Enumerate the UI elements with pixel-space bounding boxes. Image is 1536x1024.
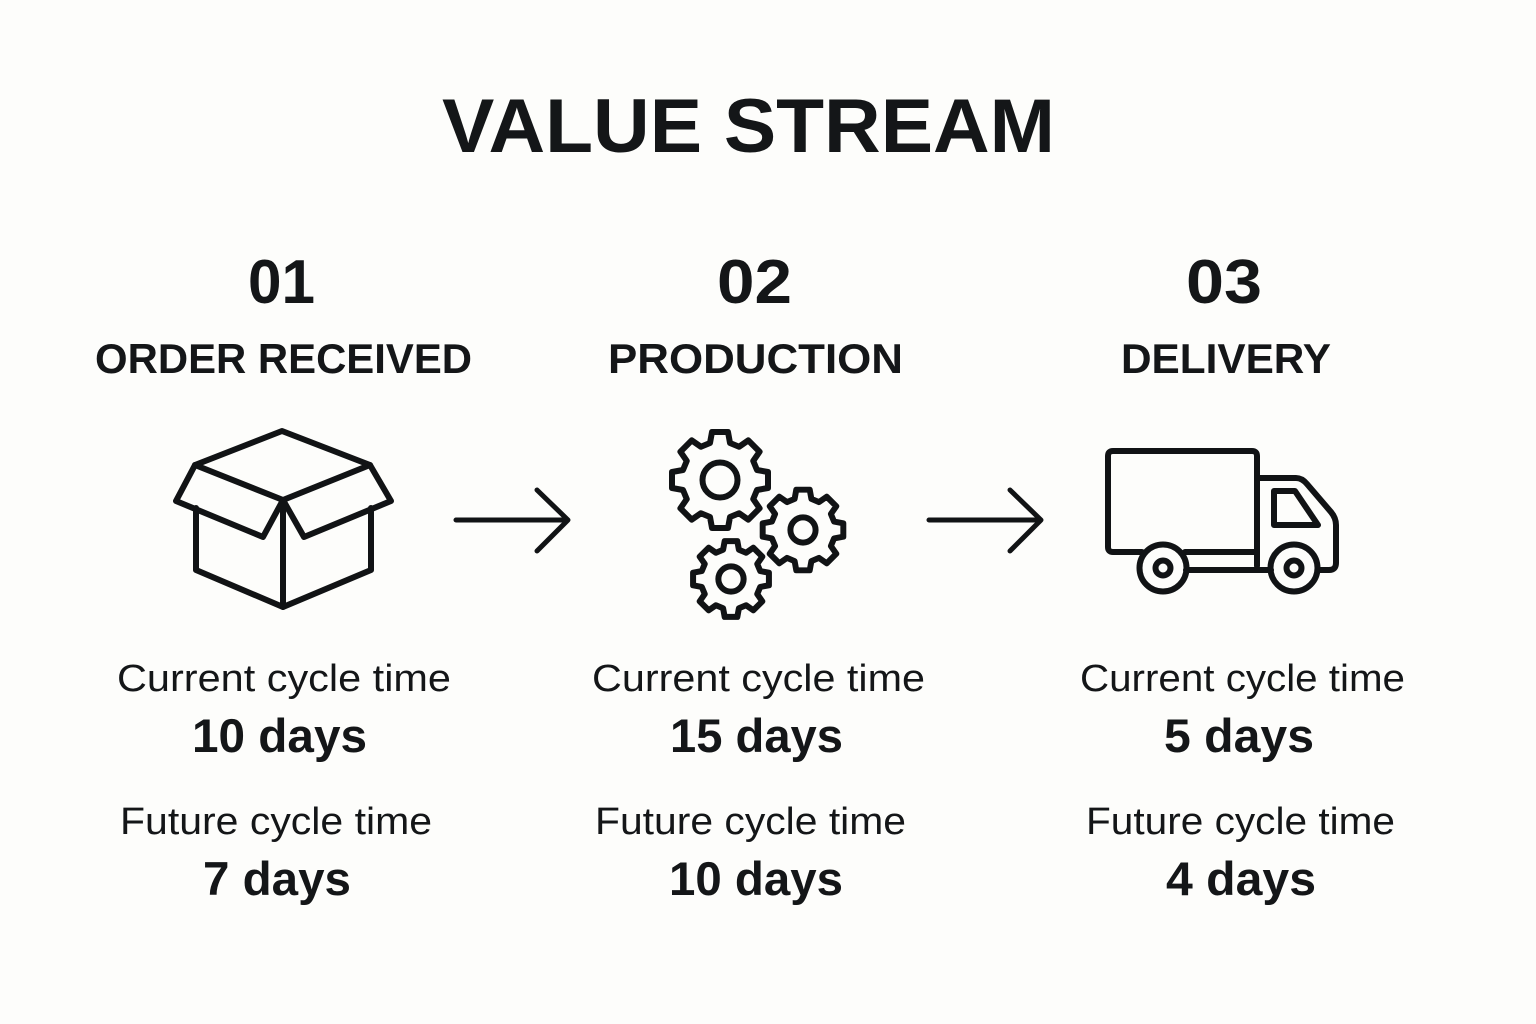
label: future cycle time: Future cycle time bbox=[120, 801, 432, 843]
arrow: order received to production bbox=[456, 490, 568, 551]
step number 01: 01 bbox=[248, 248, 315, 317]
panel: step 01 order received bbox=[95, 248, 472, 905]
label: future cycle time: Future cycle time bbox=[595, 801, 906, 843]
label: future cycle time: Future cycle time bbox=[1086, 801, 1395, 843]
value: future 4 days: 4 days bbox=[1166, 852, 1316, 905]
label: current cycle time: Current cycle time bbox=[1080, 658, 1405, 700]
title: VALUE STREAM bbox=[442, 84, 1055, 169]
heading: order received: ORDER RECEIVED bbox=[95, 335, 472, 382]
label: current cycle time: Current cycle time bbox=[592, 658, 925, 700]
value: future 7 days: 7 days bbox=[203, 852, 351, 905]
heading: production: PRODUCTION bbox=[608, 335, 903, 382]
heading: delivery: DELIVERY bbox=[1121, 335, 1331, 382]
icon: open box bbox=[176, 431, 391, 607]
icon: delivery truck bbox=[1108, 451, 1336, 592]
label: current cycle time: Current cycle time bbox=[117, 658, 451, 700]
arrow: production to delivery bbox=[929, 490, 1041, 551]
value: current 15 days: 15 days bbox=[670, 709, 843, 762]
value: future 10 days: 10 days bbox=[669, 852, 843, 905]
step number 02: 02 bbox=[717, 248, 792, 317]
value: current 5 days: 5 days bbox=[1164, 709, 1314, 762]
panel: step 03 delivery bbox=[1080, 248, 1405, 905]
icon: three gears bbox=[672, 432, 843, 617]
panel: step 02 production bbox=[592, 248, 925, 905]
step number 03: 03 bbox=[1186, 248, 1262, 317]
value: current 10 days: 10 days bbox=[192, 709, 367, 762]
